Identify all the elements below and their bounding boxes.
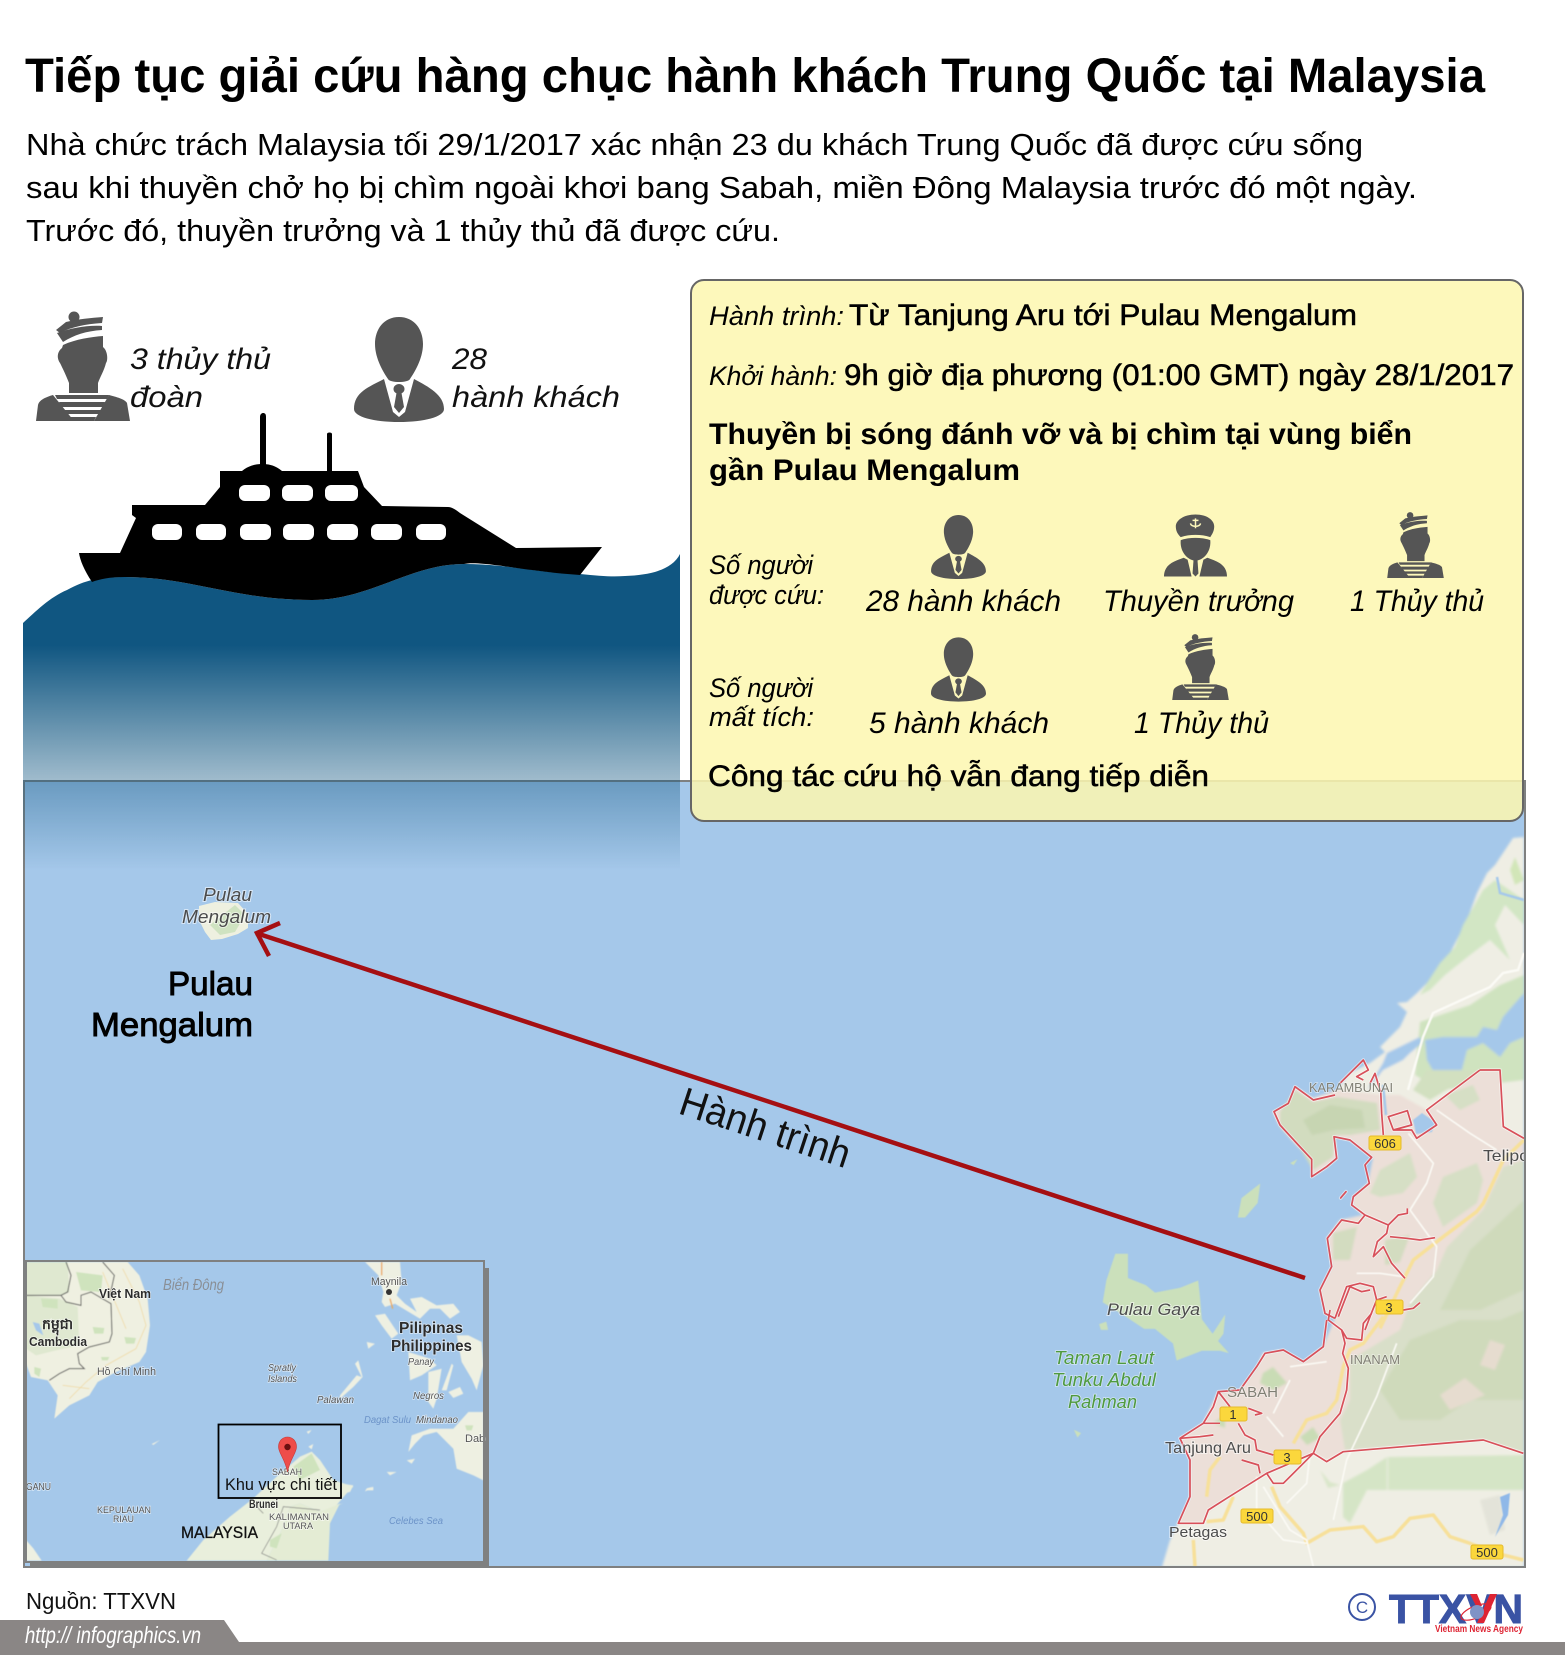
missing sailor: [1134, 634, 1269, 740]
arrow label: Hành trình: Hành trình: [674, 1080, 856, 1177]
passenger count: 28 passengers: [354, 317, 620, 422]
inset labels: SABAH: [272, 1467, 302, 1477]
passenger count: 28 passengers: hành khách: [452, 381, 620, 414]
map labels: KARAMBUNAI: [1309, 1080, 1393, 1095]
inset labels: MALAYSIA: [181, 1523, 259, 1542]
inset labels: Việt Nam: [99, 1286, 151, 1301]
footer band: [0, 1620, 1565, 1655]
row: missing: [709, 634, 1269, 740]
inset: regional locator map: [26, 1261, 489, 1568]
inset labels: Dagat Sulu: [364, 1415, 411, 1426]
passenger count: 28 passengers: 28: [451, 343, 487, 376]
inset labels: Cambodia: [29, 1334, 88, 1349]
panel: journey details: [691, 280, 1523, 821]
sea with gradient: [23, 554, 680, 870]
inset labels: Pilipinas: [399, 1320, 463, 1337]
route line: Từ Tanjung Aru tới Pulau Mengalum: [849, 299, 1357, 332]
inset labels: GANU: [26, 1482, 51, 1493]
row: rescued: Số người: [709, 550, 814, 580]
road badges: [1220, 1136, 1503, 1560]
inset labels: UTARA: [283, 1521, 313, 1531]
row: missing: mất tích:: [709, 702, 814, 732]
rescued sailor: 1 Thủy thủ: [1350, 585, 1484, 618]
label: Pulau Mengalum: [91, 965, 253, 1043]
road badges: 3: [1385, 1300, 1393, 1315]
road badges: 3: [1283, 1450, 1291, 1465]
missing sailor: 1 Thủy thủ: [1134, 707, 1269, 740]
route line: Hành trình:: [709, 301, 844, 331]
label: Pulau Mengalum: Pulau: [168, 965, 253, 1002]
row: rescued: [709, 512, 1484, 618]
map labels: SABAH: [1227, 1384, 1278, 1401]
row: missing: Số người: [709, 673, 814, 703]
website url: http:// infographics.vn: [25, 1622, 201, 1648]
city boundary lines: [1178, 1060, 1524, 1523]
map labels: Pulau Gaya: [1107, 1300, 1200, 1319]
rescued captain: [1103, 514, 1294, 618]
intro paragraph: Trước đó, thuyền trưởng và 1 thủy thủ đã được cứu.: [26, 213, 780, 248]
inset labels: KALIMANTAN: [269, 1512, 329, 1522]
missing passengers: [869, 637, 1049, 740]
inset labels: Negros: [413, 1391, 444, 1402]
row: rescued: được cứu:: [709, 580, 824, 610]
rescue ongoing statement: Công tác cứu hộ vẫn đang tiếp diễn: [708, 760, 1209, 793]
departure line: 9h giờ địa phương (01:00 GMT) ngày 28/1/2017: [844, 359, 1514, 392]
road badges: 1: [1229, 1407, 1237, 1422]
logo: TTXVN: TTXVN: [1389, 1586, 1523, 1632]
title: Tiếp tục giải cứu hàng chục hành khách Trung Quốc tại Malaysia: [25, 50, 1485, 103]
inset labels: Spratly: [268, 1363, 297, 1374]
inset labels: RIAU: [113, 1514, 134, 1524]
incident statement: [709, 418, 1412, 487]
inset labels: កម្ពុជា: [42, 1316, 73, 1336]
inset labels: KEPULAUAN: [97, 1505, 151, 1515]
detail area box: [218, 1424, 341, 1498]
map labels: INANAM: [1350, 1352, 1400, 1367]
map labels: [1052, 1080, 1529, 1541]
inset labels: Islands: [268, 1374, 297, 1385]
inset labels: [26, 1276, 485, 1542]
inset labels: Dab: [465, 1433, 485, 1445]
inset labels: Panay: [408, 1357, 435, 1368]
inset labels: Philippines: [391, 1338, 472, 1355]
road badges: 500: [1246, 1509, 1268, 1524]
inset labels: Palawan: [317, 1395, 354, 1406]
crew count: 3 sailors: 3 thủy thủ: [130, 343, 271, 376]
departure line: Khởi hành:: [709, 361, 837, 391]
detail area box: Khu vực chi tiết: [225, 1475, 337, 1494]
inset labels: Mindanao: [416, 1415, 458, 1426]
logo: TTXVN: C: [1356, 1598, 1368, 1617]
map labels: Rahman: [1068, 1392, 1137, 1412]
ship silhouette: [79, 413, 602, 600]
incident statement: Thuyền bị sóng đánh vỡ và bị chìm tại vùng biển: [709, 418, 1412, 451]
map labels: Taman Laut: [1054, 1348, 1155, 1368]
label: Pulau Mengalum: Mengalum: [91, 1006, 253, 1043]
inset labels: Celebes Sea: [389, 1516, 443, 1527]
map labels: Tanjung Aru: [1165, 1440, 1251, 1457]
intro paragraph: Nhà chức trách Malaysia tối 29/1/2017 xác nhận 23 du khách Trung Quốc đã được cứu sống: [26, 127, 1363, 162]
map labels: Telipo: [1483, 1148, 1529, 1165]
logo: TTXVN: Vietnam News Agency: [1435, 1624, 1523, 1635]
icon: location pin: [278, 1437, 296, 1472]
inset labels: Biển Đông: [163, 1276, 224, 1294]
inset labels: Brunei: [249, 1497, 278, 1511]
inset labels: Maynila: [371, 1276, 408, 1288]
missing passengers: 5 hành khách: [869, 707, 1049, 740]
arrow: journey route: [256, 923, 1305, 1278]
rescued passengers: [865, 515, 1061, 618]
map labels: Tunku Abdul: [1052, 1370, 1157, 1390]
source: Nguồn: TTXVN: [26, 1588, 176, 1614]
incident statement: gần Pulau Mengalum: [709, 454, 1020, 487]
rescued captain: Thuyền trưởng: [1103, 585, 1294, 618]
crew count: 3 sailors: đoàn: [130, 381, 203, 414]
crew count: 3 sailors: [36, 312, 271, 421]
rescued passengers: 28 hành khách: [865, 585, 1061, 618]
map: Kota Kinabalu coast: [24, 781, 1529, 1567]
road badges: 500: [1476, 1545, 1498, 1560]
island: Pulau Mengalum: Pulau: [203, 885, 252, 905]
island: Pulau Mengalum: [182, 885, 271, 940]
map labels: Petagas: [1169, 1524, 1227, 1541]
intro paragraph: sau khi thuyền chở họ bị chìm ngoài khơi bang Sabah, miền Đông Malaysia trước đó một ngày.: [26, 170, 1417, 205]
rescued sailor: [1350, 512, 1484, 618]
road badges: 606: [1374, 1136, 1396, 1151]
inset labels: Hồ Chí Minh: [97, 1366, 156, 1378]
intro paragraph: [26, 127, 1417, 248]
island: Pulau Mengalum: Mengalum: [182, 907, 271, 927]
